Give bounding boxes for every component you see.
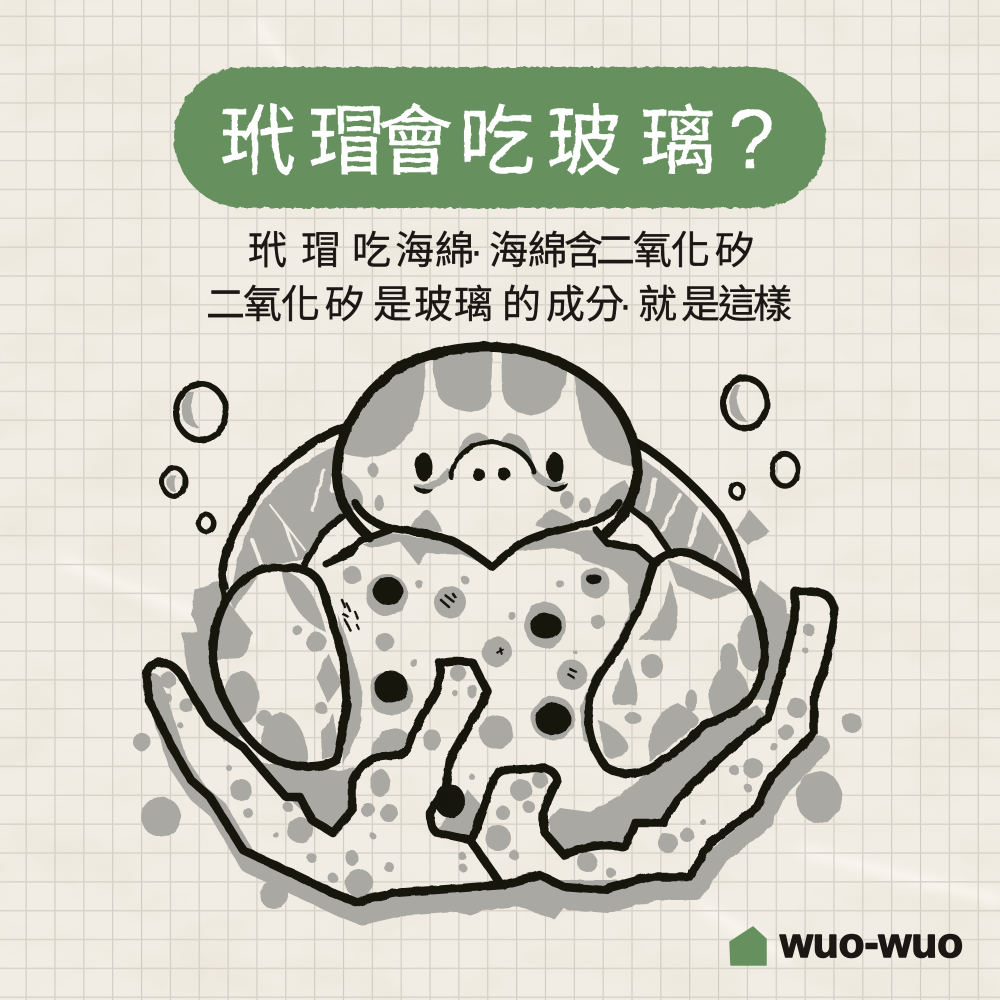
left flipper shading xyxy=(215,570,342,765)
bubbles xyxy=(162,378,798,532)
head gray markings xyxy=(341,351,632,532)
shell gray pattern right xyxy=(630,455,741,582)
flippers xyxy=(213,552,766,774)
coral shadow xyxy=(152,683,820,915)
left flipper outline xyxy=(213,568,347,767)
icon: house xyxy=(730,927,766,965)
bubble large left xyxy=(176,384,226,440)
inner shell lines xyxy=(304,508,670,565)
subtitle text block xyxy=(206,230,792,327)
sponge tick marks xyxy=(342,594,576,678)
shell outline xyxy=(222,427,748,600)
sponge black holes xyxy=(373,574,602,735)
title banner xyxy=(174,67,826,208)
sponge xyxy=(326,530,655,747)
eyes xyxy=(416,452,564,482)
coral gray spots xyxy=(160,624,815,897)
subtitle line 2: 二氧化矽是玻璃的成分·就是這樣 xyxy=(206,284,792,327)
logo xyxy=(730,919,963,966)
shell light streaks xyxy=(252,450,720,565)
right flipper outline xyxy=(588,552,765,774)
mouth xyxy=(451,442,534,477)
coral outline xyxy=(146,591,834,902)
subtitle line 1: 玳瑁吃海綿·海綿含二氧化矽 xyxy=(248,230,754,273)
bubble small right xyxy=(730,484,744,498)
nostrils xyxy=(473,468,510,482)
bubble large right xyxy=(723,378,767,428)
sponge top outline xyxy=(326,530,655,564)
shell gray pattern left xyxy=(232,445,344,590)
bubble medium left xyxy=(162,468,186,496)
sponge gray shading xyxy=(343,530,653,747)
coral gray shading xyxy=(182,600,795,853)
bubble medium right xyxy=(772,454,798,486)
wordmark: wuo-wuo xyxy=(779,919,963,966)
turtle head xyxy=(335,335,645,567)
title pill xyxy=(174,67,826,208)
gray background blotches xyxy=(133,510,862,909)
shell xyxy=(222,427,748,600)
illustration: hawksbill turtle hugging a sponge on coral xyxy=(133,335,862,920)
right flipper shading xyxy=(598,560,766,762)
title text: 玳瑁會吃玻璃? xyxy=(220,92,775,186)
head outline xyxy=(337,347,637,537)
coral black hole xyxy=(435,784,465,818)
cheek marks xyxy=(413,483,568,494)
coral underside blobs xyxy=(320,880,690,920)
chin line xyxy=(355,503,619,567)
bubble small left xyxy=(198,514,214,532)
